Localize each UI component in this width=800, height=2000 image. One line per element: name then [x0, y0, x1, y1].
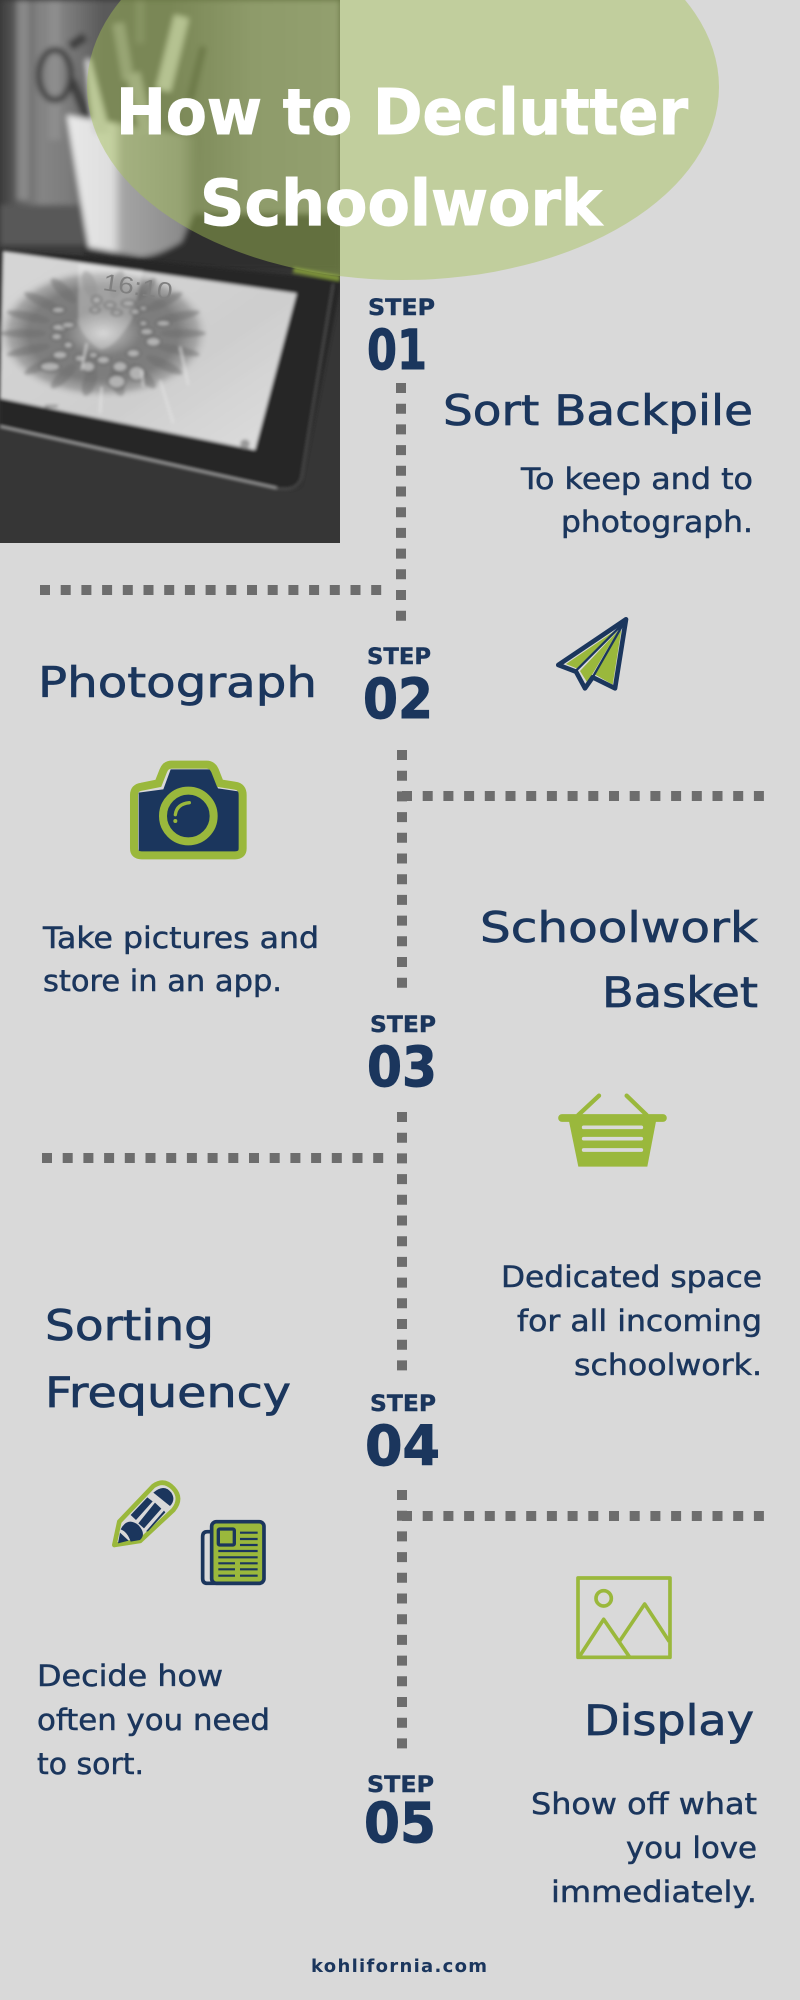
step 1 heading: Sort Backpile: Sort Backpile	[443, 386, 753, 435]
step 4 heading: Sorting Frequency: Frequency	[45, 1368, 291, 1417]
step 04 label: STEP	[370, 1391, 436, 1417]
step 2 description: store in an app.	[43, 964, 282, 998]
step 3 description	[501, 1260, 762, 1382]
step 1 description: To keep and to	[520, 462, 753, 496]
step 04 label: 04	[365, 1414, 440, 1478]
step 3 heading: Schoolwork Basket: Schoolwork	[480, 903, 759, 952]
step 3 description: for all incoming	[517, 1304, 762, 1338]
step 5 description: Show off what	[531, 1787, 757, 1821]
icon: picture frame	[578, 1578, 670, 1657]
step 1 description	[520, 462, 753, 539]
photo: wall, cup and pens	[0, 0, 340, 270]
step 5 description	[531, 1787, 757, 1909]
step 4 description	[37, 1659, 270, 1781]
step 01 label: STEP	[368, 295, 435, 321]
step 5 description: immediately.	[551, 1875, 757, 1909]
step 2 description	[42, 921, 319, 998]
step 01 label	[367, 295, 435, 382]
step 05 label: 05	[364, 1791, 436, 1855]
step 03 label: STEP	[370, 1012, 436, 1038]
step 03 label: 03	[367, 1035, 437, 1099]
icon: camera	[134, 765, 243, 855]
step 5 description: you love	[626, 1831, 757, 1865]
title: Schoolwork	[200, 167, 604, 240]
photo: tablet and pencil cup on desk	[0, 0, 340, 543]
step 3 heading: Schoolwork Basket: Basket	[602, 968, 758, 1017]
step 3 description: Dedicated space	[501, 1260, 762, 1294]
step 01 label: 01	[367, 318, 427, 382]
icon: paper plane	[558, 619, 626, 688]
photo: tablet body	[0, 250, 340, 489]
step 1 description: photograph.	[561, 505, 753, 539]
step 3 heading: Schoolwork Basket	[480, 903, 759, 1017]
step 2 heading: Photograph: Photograph	[38, 658, 317, 707]
step 02 label: STEP	[367, 644, 431, 670]
step 5 heading: Display: Display	[584, 1696, 754, 1745]
step 4 description: often you need	[37, 1703, 270, 1737]
dotted connector: step 4 to step 5	[402, 1490, 764, 1750]
step 02 label: 02	[363, 667, 433, 731]
step 2 description: Take pictures and	[42, 921, 319, 955]
dotted connector: step 2 to step 3	[402, 750, 764, 990]
step 4 description: Decide how	[37, 1659, 223, 1693]
title: How to Declutter	[116, 76, 688, 149]
step 3 description: schoolwork.	[574, 1348, 762, 1382]
step 4 heading: Sorting Frequency: Sorting	[45, 1301, 214, 1350]
dotted connector: step 1 to step 2	[40, 383, 401, 622]
title ellipse	[87, 0, 719, 280]
step 03 label	[367, 1012, 437, 1099]
step 02 label	[363, 644, 433, 731]
photo: lock screen clock: 16:10	[101, 269, 174, 306]
icon: newspaper	[203, 1522, 264, 1583]
dotted connector: step 3 to step 4	[42, 1112, 402, 1372]
step 4 heading: Sorting Frequency	[45, 1301, 291, 1417]
title	[116, 76, 688, 240]
icon: pencil	[114, 1483, 178, 1545]
step 4 description: to sort.	[37, 1747, 144, 1781]
icon: basket	[562, 1096, 663, 1167]
step 05 label: STEP	[367, 1772, 434, 1798]
footer website: kohlifornia.com	[311, 1956, 487, 1977]
